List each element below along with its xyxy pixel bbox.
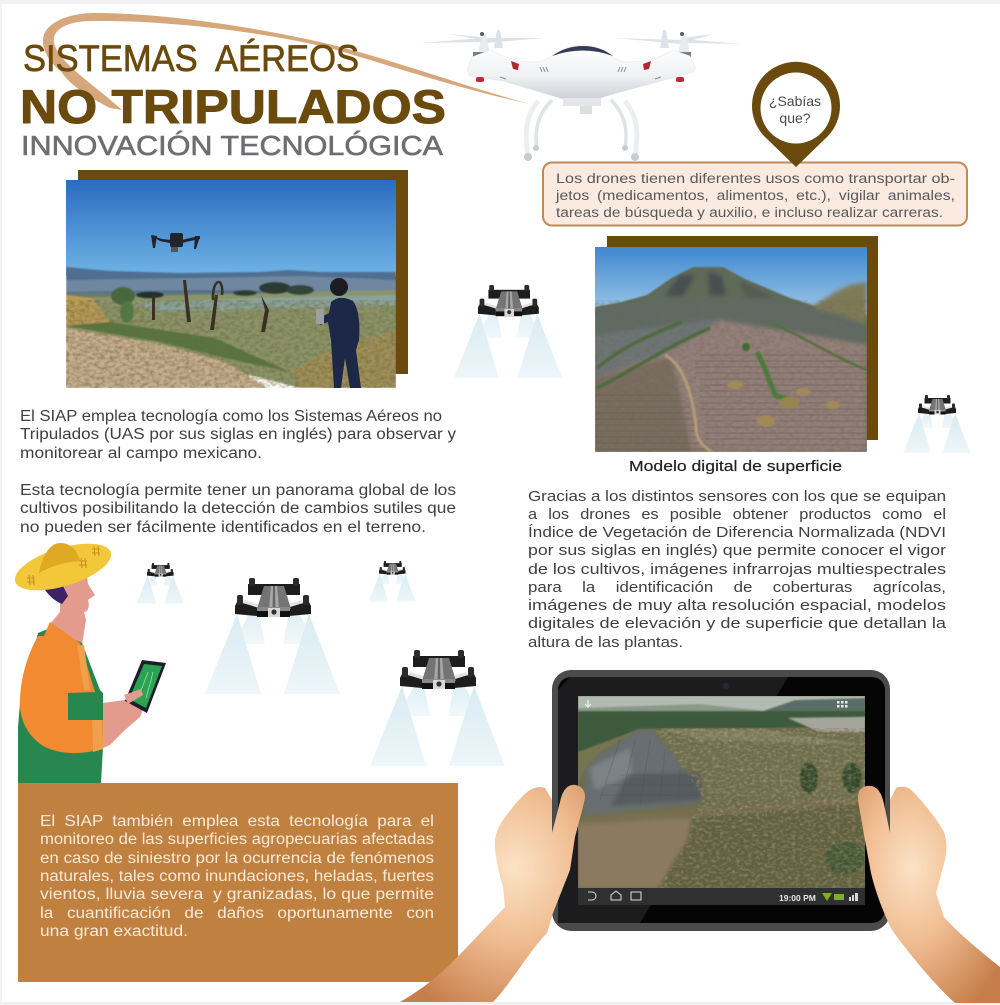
text block: sensores y productos: digitales de elevación y de superficie que detallan la bbox=[528, 615, 947, 632]
decorative swoosh line bbox=[43, 13, 530, 110]
callout: usos de drones: Los drones tienen diferentes usos como transportar ob- bbox=[556, 171, 955, 186]
hat bbox=[10, 534, 116, 600]
orange shirt torso bbox=[30, 622, 95, 725]
drone icon large, lower bbox=[370, 650, 505, 766]
photo: operador con dron bbox=[66, 170, 408, 388]
subtitle: Innovación Tecnológica: INNOVACIÓN TECNOLÓGICA bbox=[21, 130, 443, 161]
orange sleeve bbox=[20, 636, 103, 753]
text block: SIAP uso de UAS bbox=[20, 408, 456, 536]
title block bbox=[20, 38, 446, 161]
text block: SIAP uso de UAS: no pueden ser fácilmente identificados en el terreno. bbox=[20, 519, 426, 536]
person bbox=[316, 278, 361, 388]
title line: No Tripulados: NO TRIPULADOS bbox=[20, 80, 446, 133]
pin label line 2: que? bbox=[779, 110, 811, 126]
tablet screen photo: 19:00 PM bbox=[779, 893, 816, 903]
panel: monitoreo de siniestros: una gran exactitud. bbox=[40, 923, 188, 940]
illustration: white quadcopter drone bbox=[420, 30, 742, 161]
callout: usos de drones bbox=[543, 162, 967, 226]
drone icon small, right bbox=[368, 561, 416, 602]
panel: monitoreo de siniestros: monitoreo de las superficies agropecuarias afectadas bbox=[40, 831, 434, 848]
callout: usos de drones: jetos (medicamentos, alimentos, etc.), vigilar animales, bbox=[555, 188, 955, 203]
panel: monitoreo de siniestros: la cuantificación de daños oportunamente con bbox=[40, 905, 434, 922]
photo: modelo digital de superficie bbox=[595, 236, 878, 452]
tablet screen photo bbox=[578, 696, 865, 905]
text block: SIAP uso de UAS: Tripulados (UAS por sus siglas en inglés) para observar y bbox=[20, 426, 456, 443]
tablet status bar bbox=[578, 888, 865, 905]
text block: sensores y productos bbox=[528, 488, 947, 651]
illustration: tablet held by hands bbox=[400, 670, 1000, 1003]
flooded area bbox=[578, 730, 865, 888]
text block: SIAP uso de UAS: Esta tecnología permite tener un panorama global de los bbox=[20, 482, 456, 499]
text block: SIAP uso de UAS: monitorear al campo mexicano. bbox=[20, 445, 262, 462]
text block: sensores y productos: por sus siglas en inglés) que permite conocer el vigor bbox=[528, 542, 946, 559]
hand tablet bbox=[124, 660, 166, 713]
text block: SIAP uso de UAS: cultivos posibilitando la detección de cambios sutiles que bbox=[20, 500, 456, 517]
text block: SIAP uso de UAS: El SIAP emplea tecnología como los Sistemas Aéreos no bbox=[20, 408, 442, 425]
illustration: farmer with tablet bbox=[10, 534, 166, 783]
drone icon large, centre bbox=[205, 578, 340, 694]
green pocket bbox=[68, 693, 103, 720]
forearm and hand bbox=[103, 697, 146, 748]
panel: monitoreo de siniestros: vientos, lluvia severa y granizadas, lo que permite bbox=[40, 886, 434, 903]
flying drone bbox=[151, 233, 200, 252]
green overalls bbox=[18, 628, 103, 783]
text block: sensores y productos: Índice de Vegetación de Diferencia Normalizada (NDVI bbox=[528, 524, 946, 541]
callout: usos de drones: tareas de búsqueda y auxilio, e incluso realizar carreras. bbox=[556, 205, 943, 220]
drone icon small, left bbox=[136, 563, 184, 604]
hair bbox=[45, 564, 93, 604]
title line: Sistemas Aéreos: SISTEMAS AÉREOS bbox=[23, 38, 359, 79]
tablet body bbox=[552, 670, 890, 931]
panel: monitoreo de siniestros: El SIAP también emplea esta tecnología para el bbox=[40, 813, 434, 830]
text block: sensores y productos: imágenes de muy alta resolución espacial, modelos bbox=[528, 597, 946, 614]
text block: sensores y productos: de los cultivos, imágenes infrarrojas multiespectrales bbox=[528, 561, 946, 578]
text block: sensores y productos: a los drones es posible obtener productos como el bbox=[528, 506, 946, 523]
neck and face bbox=[50, 568, 95, 645]
caption: modelo digital: Modelo digital de superficie bbox=[629, 458, 842, 475]
text block: sensores y productos: altura de las plantas. bbox=[528, 634, 683, 651]
drone icon with beams, right bbox=[903, 395, 970, 453]
panel: monitoreo de siniestros: en caso de siniestro por la ocurrencia de fenómenos bbox=[40, 850, 434, 867]
panel: monitoreo de siniestros: naturales, tales como inundaciones, heladas, fuertes bbox=[40, 868, 434, 885]
panel: monitoreo de siniestros bbox=[18, 783, 458, 982]
pin label: ¿Sabías bbox=[769, 93, 821, 109]
drone icon with beams bbox=[454, 285, 562, 378]
text block: sensores y productos: para la identificación de coberturas agrícolas, bbox=[528, 579, 946, 596]
right hand bbox=[858, 786, 1000, 1003]
pin: ¿Sabías que? bbox=[752, 62, 840, 167]
text block: sensores y productos: Gracias a los distintos sensores con los que se equipan bbox=[528, 488, 946, 505]
left hand bbox=[400, 785, 585, 1002]
